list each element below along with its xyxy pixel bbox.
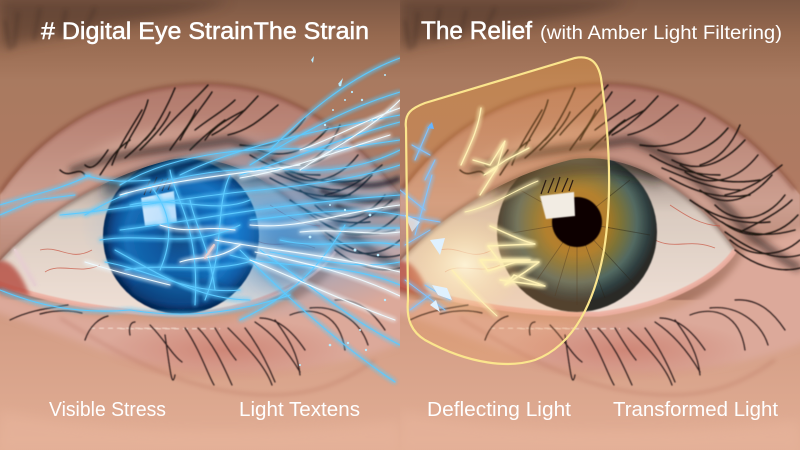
- label: transformed light: Transformed Light: [613, 399, 778, 421]
- pupil: [552, 197, 602, 247]
- glare behind lens: [409, 225, 523, 312]
- title: the relief: The Relief: [421, 17, 532, 45]
- window reflection highlight: [540, 192, 575, 219]
- label: light textens: Light Textens: [239, 399, 360, 421]
- eye and skin photo: right: [390, 0, 800, 450]
- deflected blue shards: [400, 125, 450, 310]
- amber lens rim: [406, 57, 609, 364]
- amber lightning bolts: [452, 108, 545, 316]
- amber lens overlay: [406, 57, 609, 364]
- reflected lashes: [541, 177, 573, 194]
- panel: the strain (left): [0, 0, 400, 450]
- subtitle: amber light filtering: (with Amber Light Filtering): [540, 22, 782, 44]
- reflected lashes: [144, 177, 172, 195]
- window reflection highlight: [141, 191, 177, 226]
- label: visible stress: Visible Stress: [49, 399, 166, 421]
- ice crystal fragments: [405, 122, 452, 312]
- blue glow: [95, 139, 400, 312]
- eye and skin photo: left: [0, 0, 410, 450]
- light sparks: [299, 56, 391, 366]
- amber iris: [495, 152, 660, 312]
- panel: the relief (right): [390, 0, 800, 450]
- title: left: # Digital Eye StrainThe Strain: [41, 18, 369, 45]
- label: deflecting light: Deflecting Light: [427, 399, 571, 421]
- dark upper lashes over lightning: [320, 178, 400, 213]
- blue stressed iris: [103, 158, 335, 314]
- lightning strain streaks: [0, 58, 400, 382]
